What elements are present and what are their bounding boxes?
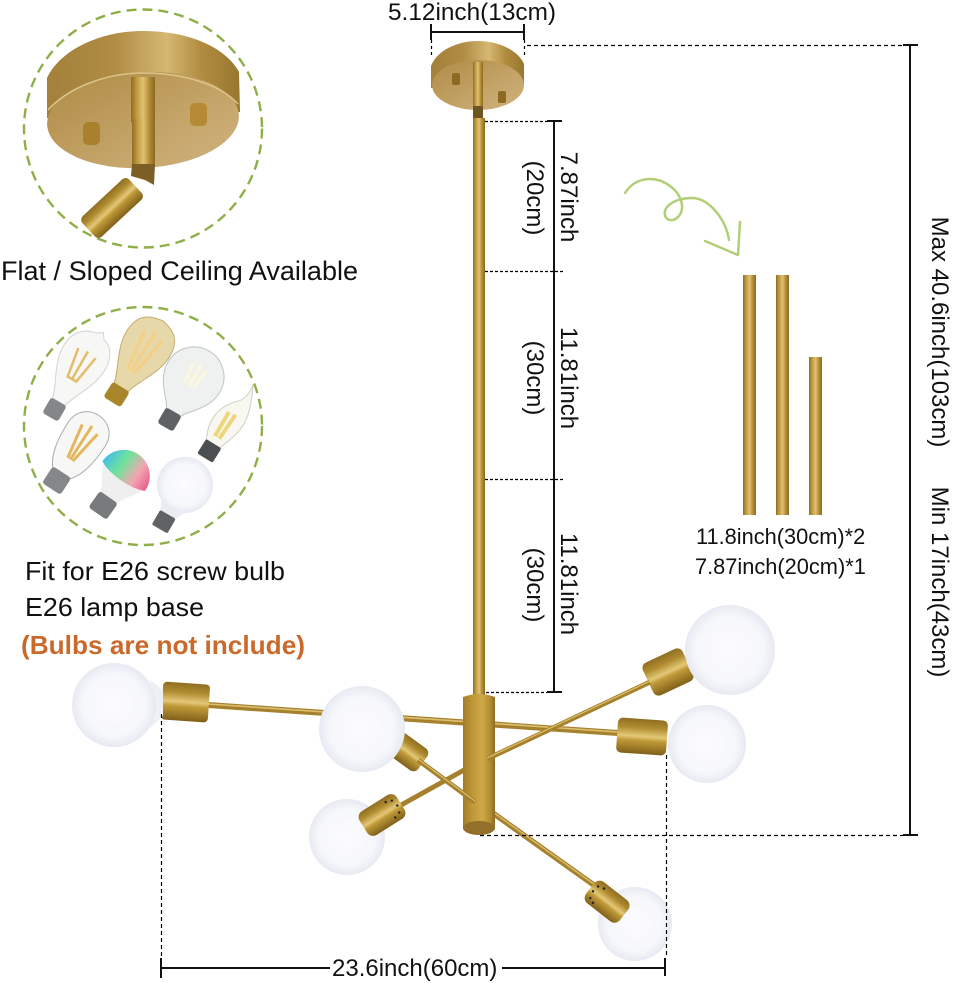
dimension: stem segments: (30cm) <box>521 341 548 415</box>
bulb: amber edison <box>91 307 184 415</box>
dimension: stem segments: 7.87inch <box>555 152 582 242</box>
arm: left to right <box>208 704 618 733</box>
bulb: rgb smart <box>76 440 160 528</box>
text: bulb compatibility: Fit for E26 screw bulb <box>25 558 285 586</box>
panel: compatible bulbs <box>24 307 264 545</box>
globe: far left <box>72 663 163 747</box>
text: bulb compatibility: E26 lamp base <box>25 594 204 622</box>
dimension: overall height <box>480 45 953 836</box>
socket: left <box>161 681 210 723</box>
bulb: white globe <box>135 447 223 543</box>
globe: lower left <box>309 799 385 875</box>
arrow: green curly pointer <box>625 179 740 255</box>
text: bulb compatibility <box>25 558 285 622</box>
dimension: stem segments: 11.81inch <box>555 533 582 635</box>
socket: right <box>616 717 668 756</box>
arm: lower right <box>490 810 598 888</box>
dimension: canopy width <box>388 0 556 58</box>
socket: upper right <box>640 646 696 698</box>
socket: lower left <box>356 791 408 839</box>
globe: right <box>668 705 746 783</box>
dimension: overall height: Max 40.6inch(103cm) <box>926 217 953 447</box>
dimension: stem segments <box>485 121 582 692</box>
arm: inner upper-left into hub <box>418 759 475 802</box>
bulb: tubular <box>33 404 117 501</box>
caption: flat sloped ceiling: Flat / Sloped Ceiling Available <box>1 256 358 286</box>
text: rod lengths <box>695 524 866 579</box>
chandelier <box>72 41 775 961</box>
dimension: overall height: Min 17inch(43cm) <box>926 487 953 677</box>
arm: upper right <box>487 681 650 759</box>
rod: short <box>809 357 822 515</box>
stem rod <box>473 118 485 696</box>
panel: ceiling canopy detail <box>24 10 262 248</box>
dimension: stem segments: (30cm) <box>521 548 548 622</box>
dimension: stem segments: 11.81inch <box>555 327 582 429</box>
dashed circle: bulbs <box>24 307 262 545</box>
dashed circle: canopy <box>24 10 262 248</box>
text: rod lengths: 7.87inch(20cm)*1 <box>695 554 866 579</box>
socket: upper left <box>381 727 431 774</box>
canopy base plate <box>45 31 241 185</box>
angled swivel arm <box>79 176 145 240</box>
small canopy <box>431 41 524 118</box>
globe: upper right <box>685 605 775 695</box>
bulb: candle <box>193 376 264 466</box>
extension rods <box>743 275 822 515</box>
dimension: stem segments: (20cm) <box>521 161 548 235</box>
dimension: overall width <box>161 714 666 982</box>
dimension: overall width: 23.6inch(60cm) <box>332 955 497 982</box>
central hub cylinder <box>463 694 495 835</box>
globe: upper left <box>319 686 405 772</box>
text: bulbs not included note: (Bulbs are not include) <box>21 630 305 660</box>
rod: long 2 <box>776 275 789 515</box>
rod: long 1 <box>743 275 756 515</box>
bulb: clear globe <box>139 336 235 442</box>
bulb: clear ST <box>29 319 121 429</box>
text: rod lengths: 11.8inch(30cm)*2 <box>696 524 865 549</box>
globe: lower right <box>598 887 672 961</box>
arm: lower left <box>394 770 464 809</box>
socket: lower right <box>582 878 632 926</box>
